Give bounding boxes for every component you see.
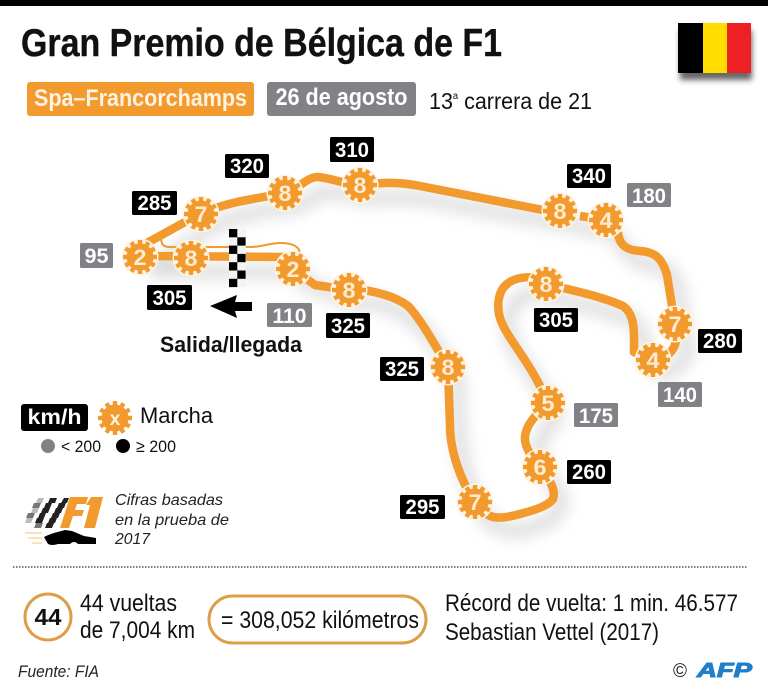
- speed 305: 305: [539, 309, 573, 332]
- speed 325: 325: [385, 358, 419, 381]
- gear 7: 7: [194, 202, 208, 227]
- gear 7: [456, 484, 494, 520]
- venue label: Spa–Francorchamps: [34, 85, 247, 112]
- gear 6: [522, 448, 558, 486]
- race number: 13: [429, 88, 455, 114]
- speed 95: 95: [84, 245, 109, 268]
- total distance: [209, 596, 426, 643]
- legend: gear label: Marcha: [140, 403, 214, 428]
- data note line 2: en la prueba de: [115, 512, 229, 529]
- gear 7: 7: [668, 312, 682, 337]
- race track: [140, 177, 676, 518]
- legend: at least 200: ≥ 200: [136, 437, 176, 456]
- legend: gear key: x: [110, 409, 121, 430]
- laps badge: [25, 594, 71, 640]
- gear 6: 6: [534, 455, 546, 480]
- gear 8: [342, 166, 378, 204]
- credit: AFP: AFP: [696, 660, 753, 682]
- gear 8: 8: [354, 173, 366, 198]
- speed 320: 320: [230, 155, 264, 178]
- F1 logo: [25, 497, 103, 545]
- legend: km/h key: km/h: [28, 406, 82, 429]
- legend: below 200: [41, 437, 101, 456]
- gear 4: 4: [646, 348, 660, 373]
- gear 2: [274, 250, 312, 288]
- gear 8: 8: [184, 246, 198, 271]
- start/finish label: Salida/llegada: [160, 332, 303, 357]
- gear 8: [266, 174, 304, 212]
- gear 8: 8: [554, 199, 566, 224]
- legend: at least 200: [116, 437, 176, 456]
- data note line 3: 2017: [114, 531, 151, 548]
- legend: gear key: [98, 401, 132, 435]
- gear 5: [530, 384, 566, 422]
- speed 325: 325: [331, 315, 365, 338]
- speed 260: 260: [572, 461, 606, 484]
- gear 8: 8: [540, 272, 552, 297]
- laps text: [80, 590, 195, 644]
- title: Gran Premio de Bélgica de F1: [21, 22, 502, 65]
- gear 4: [588, 202, 624, 238]
- race number: carrera de 21: [458, 88, 592, 114]
- gear 8: 8: [442, 355, 454, 380]
- speed 180: 180: [632, 185, 666, 208]
- speed 110: 110: [272, 305, 306, 328]
- lap record: Sebastian Vettel (2017): [445, 619, 659, 646]
- race number: a: [453, 91, 459, 102]
- speed 295: 295: [406, 496, 440, 519]
- gear 7: [182, 196, 220, 232]
- data note: Cifras basadas: [115, 492, 223, 509]
- gear 8: [430, 348, 466, 386]
- speed 110: [267, 303, 312, 328]
- gear 2, La Source exit: [122, 238, 158, 276]
- top bar: [0, 0, 768, 6]
- arrow: race direction: [210, 295, 252, 318]
- icon: Belgian flag: [678, 23, 752, 80]
- lap record: [445, 590, 738, 646]
- gear 4: [634, 342, 672, 378]
- speed 140: 140: [663, 384, 697, 407]
- track shadow: [150, 191, 688, 531]
- speed 175: 175: [579, 405, 613, 428]
- gear 8: [330, 272, 368, 308]
- gear 8: [172, 240, 210, 276]
- credit: AFP: [673, 660, 753, 682]
- start/finish checkered flag: [229, 229, 246, 287]
- gear 8: [542, 192, 578, 230]
- gear 5: 5: [542, 391, 554, 416]
- credit: AFP: ©: [673, 661, 687, 682]
- legend: below 200: < 200: [61, 437, 101, 456]
- legend: km/h key: [21, 404, 88, 431]
- speed 310: 310: [335, 139, 369, 162]
- gear 8: [528, 266, 564, 302]
- speed 95: [80, 243, 113, 268]
- gear 2: 2: [286, 257, 300, 282]
- gear 8: 8: [278, 181, 292, 206]
- laps text: 44 vueltas: [80, 590, 177, 617]
- gear 7: [656, 306, 694, 342]
- laps badge: 44: [34, 604, 62, 630]
- gear 4: 4: [600, 208, 613, 233]
- speed 305: 305: [152, 287, 187, 310]
- speed 340: 340: [572, 165, 606, 188]
- speed 280: 280: [703, 330, 737, 353]
- gear 7: 7: [468, 490, 482, 515]
- source: Fuente: FIA: [18, 662, 99, 681]
- date label: 26 de agosto: [276, 84, 408, 111]
- gear 2, La Source exit: 2: [134, 245, 146, 270]
- total distance: = 308,052 kilómetros: [221, 607, 419, 634]
- laps text: de 7,004 km: [80, 617, 195, 644]
- legend: [21, 401, 214, 456]
- gear 8: 8: [342, 278, 356, 303]
- speed 285: 285: [138, 192, 172, 215]
